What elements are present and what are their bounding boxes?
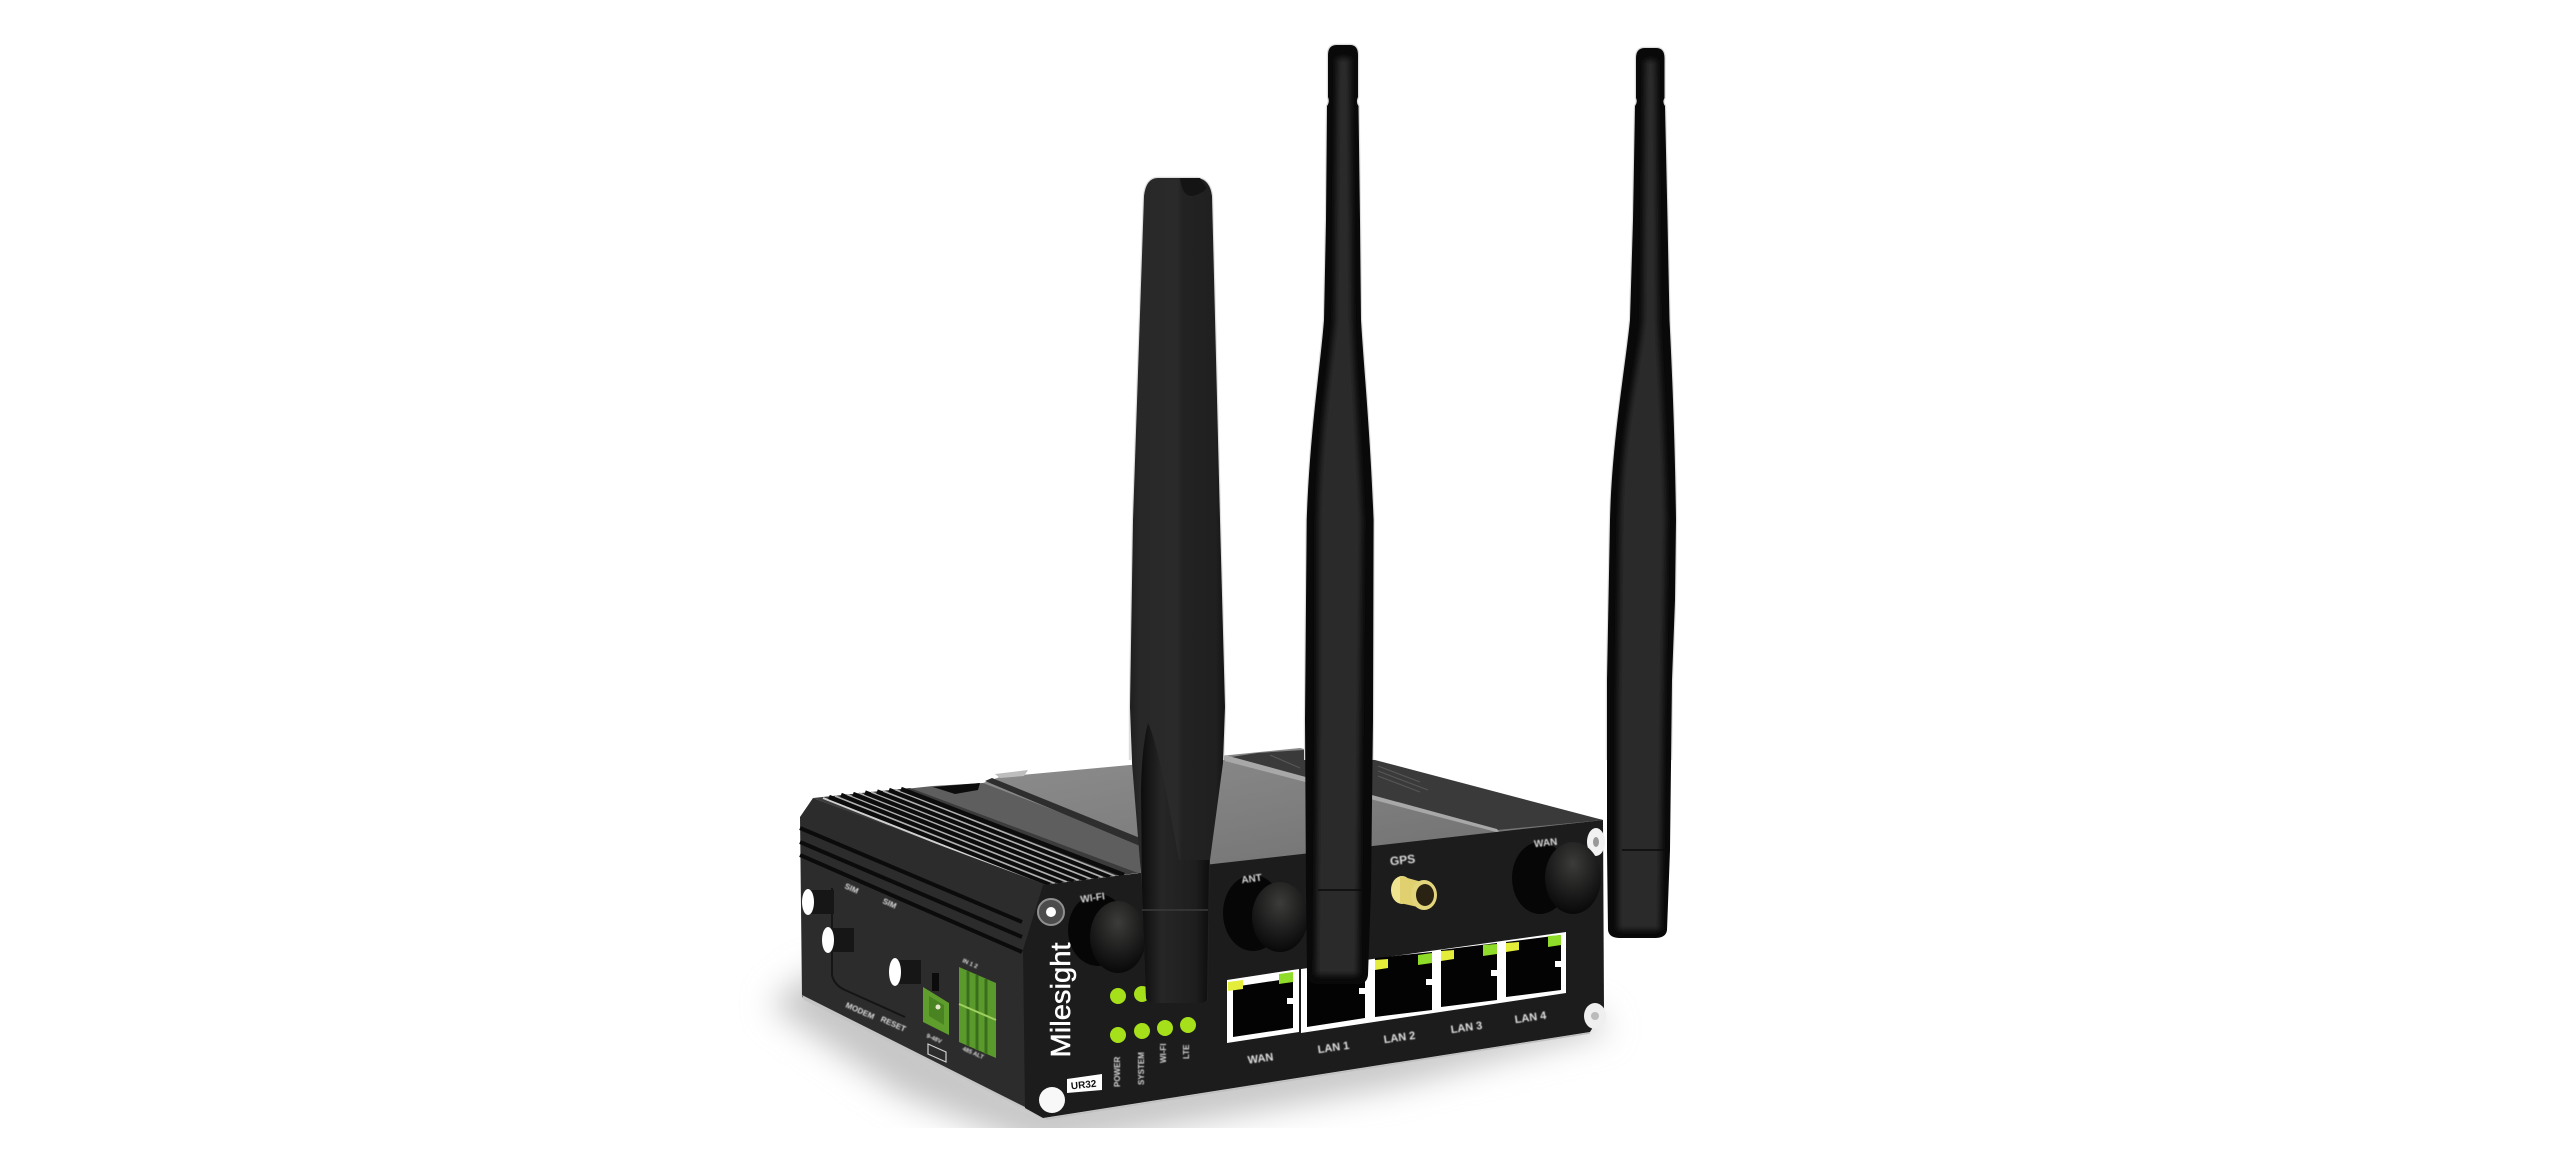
plate ridges <box>1270 755 1428 792</box>
rear dark plate <box>1225 750 1603 830</box>
port labels: LAN 1 <box>1317 1040 1350 1056</box>
front screws <box>1038 828 1606 1113</box>
LED labels: LTE <box>1182 1044 1191 1059</box>
power plug <box>923 973 949 1035</box>
antenna connectors <box>1068 842 1601 973</box>
port labels: LAN 4 <box>1514 1010 1548 1026</box>
GPS connector <box>1391 876 1437 910</box>
rear slot <box>933 783 980 794</box>
LED labels <box>1113 1043 1191 1087</box>
top rail <box>1225 755 1500 833</box>
model tag <box>1067 1074 1102 1093</box>
left side panel <box>800 798 1060 1120</box>
ground shadow <box>770 970 1610 1150</box>
paddle antenna <box>1130 178 1225 1003</box>
port labels: LAN 3 <box>1450 1020 1483 1036</box>
power symbol box <box>928 1044 946 1062</box>
connector labels: GPS <box>1389 852 1416 868</box>
middle antenna <box>1305 45 1374 984</box>
front panel <box>1023 820 1606 1119</box>
side labels: SIM <box>881 897 898 911</box>
side recess outline <box>832 888 905 1017</box>
heat sink fins <box>813 788 1138 885</box>
paddle hinge section <box>1141 723 1209 1003</box>
port indicator lights <box>1228 935 1561 991</box>
router illustration <box>766 44 1678 1128</box>
port latches <box>1287 961 1562 1004</box>
router body <box>800 748 1606 1120</box>
status LEDs <box>1110 986 1196 1043</box>
side screws <box>802 889 921 986</box>
LED labels: SYSTEM <box>1137 1052 1146 1085</box>
green terminal block <box>959 967 996 1058</box>
port labels: WAN <box>1247 1051 1274 1067</box>
right antenna <box>1607 48 1676 938</box>
side labels <box>843 882 985 1061</box>
side vents <box>800 828 1022 952</box>
connector labels: WI-FI <box>1080 891 1106 906</box>
connector labels <box>1080 837 1558 906</box>
model tag: UR32 <box>1070 1079 1097 1092</box>
side labels: 485 ALT <box>961 1046 985 1061</box>
top plate <box>905 748 1603 874</box>
side labels: SIM <box>843 882 860 896</box>
LED labels: WI-FI <box>1159 1043 1168 1063</box>
side labels: RESET <box>879 1015 907 1034</box>
ethernet ports <box>1227 932 1566 1043</box>
LED labels: POWER <box>1113 1057 1122 1087</box>
side labels: IN 1 2 <box>961 958 979 971</box>
brand text: Milesight <box>1045 942 1076 1058</box>
connector labels: WAN <box>1534 837 1558 850</box>
connector labels: ANT <box>1241 873 1263 886</box>
side strip next to fins <box>905 783 1140 874</box>
side labels: MODEM <box>844 1001 876 1021</box>
port labels <box>1247 1010 1548 1067</box>
side labels: 9-48V <box>925 1033 942 1045</box>
port labels: LAN 2 <box>1383 1030 1416 1046</box>
